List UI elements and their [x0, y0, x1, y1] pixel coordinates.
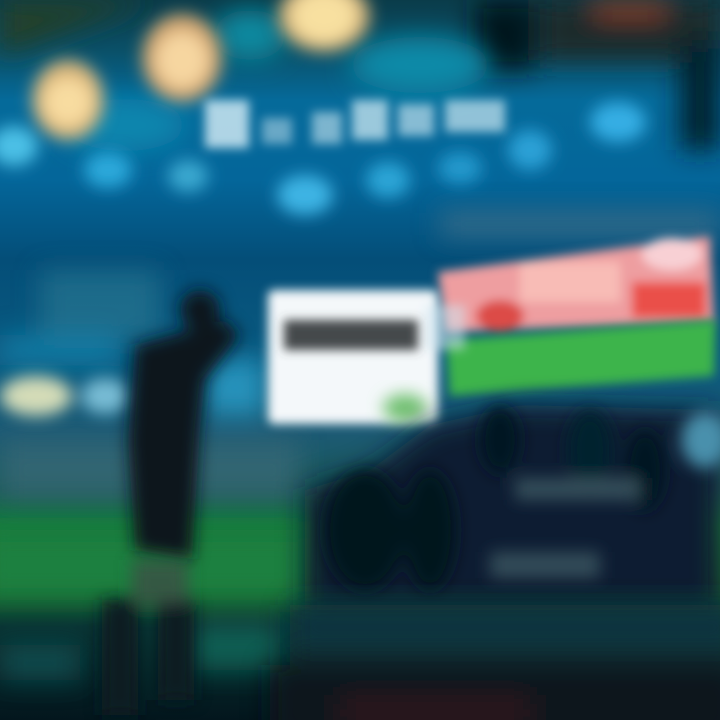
lamp: right — [278, 0, 370, 52]
flag: green band — [446, 320, 716, 396]
player: legs — [102, 560, 194, 715]
flag banner — [438, 236, 716, 396]
side glow: left light band — [0, 376, 129, 416]
player: torso — [128, 320, 240, 560]
flag: pink band — [438, 236, 714, 332]
sign: green corner — [383, 394, 427, 422]
mid-blue stands texture — [0, 212, 720, 500]
player silhouette — [102, 290, 240, 715]
dark roof beams — [0, 0, 720, 150]
lamp: middle — [142, 14, 222, 102]
player: head — [180, 290, 220, 330]
pitch — [0, 530, 310, 680]
blurred heading glow — [205, 100, 505, 148]
bottom dark floor — [270, 605, 720, 720]
white sign panel — [268, 290, 465, 424]
sign: dark text band — [284, 320, 418, 350]
teal upper glow — [65, 10, 490, 151]
crowd silhouettes — [305, 405, 720, 610]
blue stadium lights — [0, 102, 646, 215]
lamp: left — [32, 60, 104, 140]
